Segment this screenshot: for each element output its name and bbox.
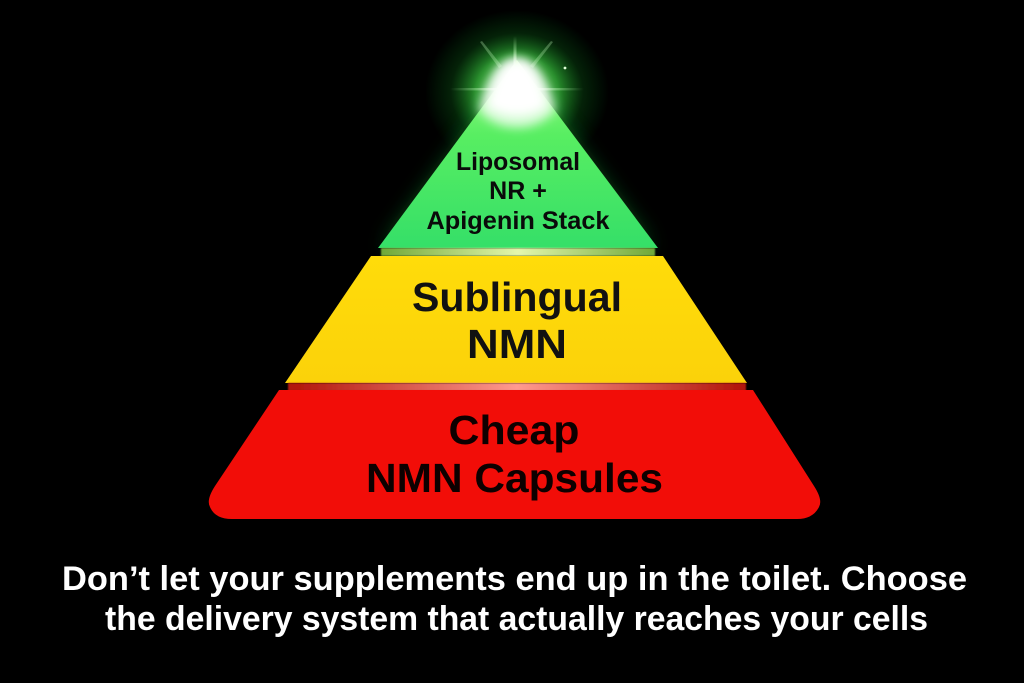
label: top tier: Apigenin Stack <box>426 207 610 235</box>
label: bottom tier: NMN Capsules <box>366 455 663 501</box>
icon: white apex light <box>478 58 556 128</box>
label: top tier: Liposomal <box>456 148 580 176</box>
label: middle tier: Sublingual <box>412 274 622 320</box>
caption: Don’t let your supplements end up in the toilet. Choose <box>62 560 967 598</box>
label: bottom tier <box>366 407 663 501</box>
caption: the delivery system that actually reaches your cells <box>105 600 928 638</box>
panel: yellow middle tier <box>285 256 747 383</box>
caption <box>62 560 967 638</box>
panel: red bottom tier <box>209 383 820 519</box>
label: middle tier <box>412 274 622 367</box>
label: top tier <box>426 148 610 235</box>
label: top tier: NR + <box>489 177 547 205</box>
connector: red tier top edge <box>288 383 746 391</box>
connector: green tier base <box>381 248 655 256</box>
panel: green top tier <box>378 58 658 256</box>
label: middle tier: NMN <box>467 321 567 367</box>
label: bottom tier: Cheap <box>448 407 580 453</box>
icon: green glow at apex <box>386 10 650 248</box>
